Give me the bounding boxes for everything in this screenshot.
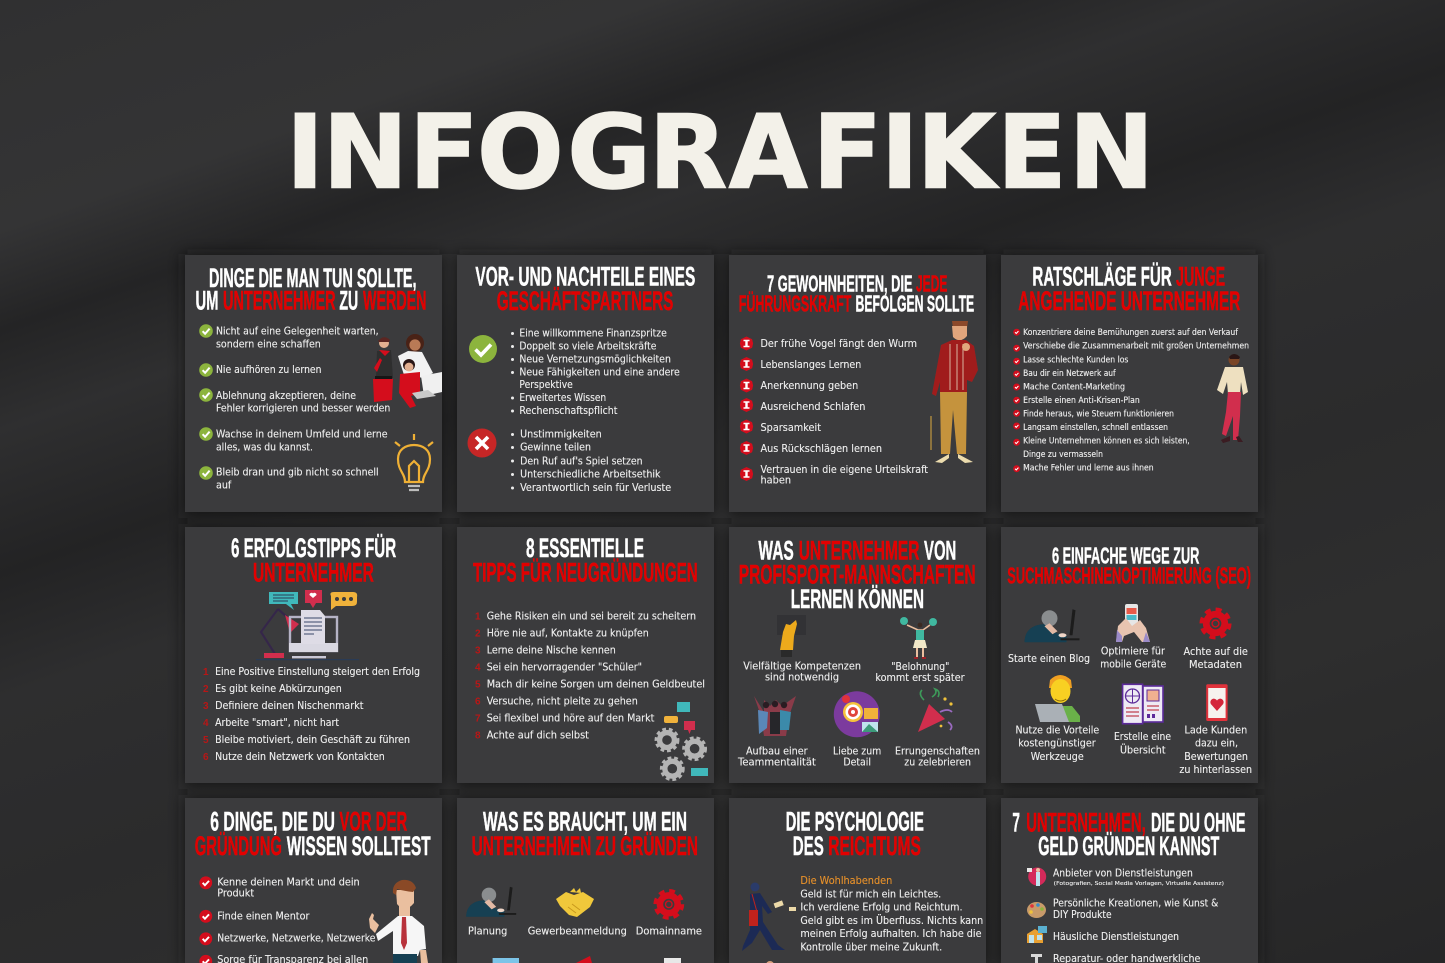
heading: DINGE DIE MAN TUN SOLLTE, [209, 263, 416, 293]
list: Vertrauen in die eigene Urteilskraft [760, 463, 928, 476]
list: Anerkennung geben [760, 379, 858, 392]
icon: photographer [1027, 868, 1046, 886]
list: disadvantages: Gewinne teilen [520, 443, 591, 454]
list: Bleibe motiviert, dein Geschäft zu führen [215, 735, 410, 746]
list: disadvantages: Unterschiedliche Arbeitsethik [520, 470, 661, 481]
text block: Kontrolle über meine Zukunft. [800, 942, 942, 953]
list: disadvantages [511, 429, 671, 494]
list: advantages: Rechenschaftspflicht [519, 406, 618, 417]
list: haben [760, 473, 791, 486]
icon: business people [373, 334, 442, 408]
icon: party popper [918, 689, 953, 732]
list: Konzentriere deine Bemühungen zuerst auf den Verkauf [1023, 327, 1239, 337]
heading: GELD GRÜNDEN KANNST [1038, 831, 1219, 861]
heading: UNTERNEHMER [253, 557, 374, 587]
panel: 8 essentielle Tipps [457, 527, 714, 783]
heading: DIE DU OHNE [1151, 808, 1246, 838]
captions row one: kommt erst später [875, 673, 965, 684]
list numbers: 6 [475, 697, 481, 708]
list: advantages: Neue Vernetzungsmöglichkeiten [519, 354, 671, 365]
heading: JEDE [916, 271, 947, 297]
icon: person at board [777, 615, 806, 657]
heading: GRÜNDUNG [195, 831, 282, 861]
heading [1007, 543, 1251, 589]
list: disadvantages: Verantwortlich sein für Verluste [520, 483, 671, 494]
heading: DES [793, 831, 824, 861]
title: INFOGRAFIKEN [286, 93, 1154, 212]
list: Finde heraus, wie Steuern funktionieren [1023, 408, 1174, 418]
list numbers [203, 667, 209, 763]
icon: businessman [369, 880, 428, 963]
heading: WAS [758, 535, 794, 565]
list: Produkt [217, 889, 254, 900]
list: Mache Content-Marketing [1023, 381, 1125, 391]
captions row two: Aufbau einer [746, 746, 808, 757]
heading: TIPPS FÜR NEUGRÜNDUNGEN [473, 557, 698, 587]
heading: RATSCHLÄGE FÜR [1032, 262, 1172, 292]
icons cropped at bottom [493, 956, 681, 963]
list numbers: 5 [475, 680, 481, 691]
icon: palette [1027, 902, 1046, 918]
heading: VOR DER [339, 807, 407, 837]
heading: UNTERNEHMEN, [1026, 808, 1146, 838]
list: Sparsamkeit [760, 421, 821, 434]
icon: phone in hands [1116, 604, 1150, 642]
list: Sei flexibel und höre auf den Markt [487, 714, 654, 725]
text block: Geld ist für mich ein Leichtes. [800, 889, 941, 900]
list: (Fotografien, Social Media Vorlagen, Virtuelle Assistenz) [1054, 881, 1224, 887]
captions row two: Übersicht [1120, 743, 1166, 756]
list [215, 667, 420, 763]
captions row two: Errungenschaften [895, 746, 980, 757]
captions row two: dazu ein, [1195, 739, 1238, 750]
panel shadows [183, 254, 1260, 963]
icon: red gear [656, 891, 682, 917]
list: Netzwerke, Netzwerke, Netzwerke [217, 934, 376, 945]
list: Ablehnung akzeptieren, deine [216, 391, 356, 402]
captions row one: "Belohnung" [891, 662, 949, 673]
captions row two: zu zelebrieren [904, 758, 971, 769]
heading [739, 271, 974, 317]
list: Wachse in deinem Umfeld und lerne [216, 429, 388, 440]
captions row one [1008, 647, 1248, 671]
icon: hammer [1031, 954, 1042, 963]
list: DIY Produkte [1053, 910, 1112, 921]
list: Lasse schlechte Kunden los [1023, 354, 1128, 364]
list numbers: 1 [203, 667, 209, 678]
list numbers: 3 [203, 701, 209, 712]
list: advantages: Neue Fähigkeiten und eine andere [519, 367, 680, 378]
heading: VOR- UND NACHTEILE EINES [475, 262, 695, 292]
text block [800, 876, 983, 953]
heading: 6 ERFOLGSTIPPS FÜR [231, 533, 396, 563]
list numbers: 5 [203, 735, 209, 746]
list numbers: 6 [203, 752, 209, 763]
list: Mache Fehler und lerne aus ihnen [1023, 462, 1154, 472]
list [1023, 327, 1249, 472]
heading [196, 263, 426, 316]
list: disadvantages: Den Ruf auf's Spiel setzen [520, 456, 643, 467]
list: auf [216, 481, 232, 492]
heading [739, 535, 976, 614]
heading: FÜHRUNGSKRAFT [739, 291, 851, 317]
heading: JUNGE [1176, 262, 1225, 292]
heading: WAS ES BRAUCHT, UM EIN [483, 807, 687, 837]
list: Definiere deinen Nischenmarkt [215, 701, 364, 712]
list: advantages: Eine willkommene Finanzspritze [519, 328, 667, 339]
icon: check [469, 335, 497, 363]
captions row two: Teammentalität [737, 758, 816, 769]
icon: planning person [466, 887, 516, 917]
list: Gehe Risiken ein und sei bereit zu scheitern [487, 612, 696, 623]
icon: sitemap [1123, 684, 1163, 724]
panel: 7 Unternehmen [1001, 798, 1258, 963]
heading: ANGEHENDE UNTERNEHMER [1018, 286, 1240, 316]
list: advantages [511, 328, 680, 417]
list: Lerne deine Nische kennen [487, 646, 616, 657]
heading: 6 DINGE, DIE DU [210, 807, 335, 837]
captions row one: Vielfältige Kompetenzen [743, 662, 861, 673]
icon: cross [468, 428, 496, 458]
check icons [1013, 329, 1020, 472]
heading [472, 807, 698, 861]
list: Nutze dein Netzwerk von Kontakten [215, 752, 385, 763]
list numbers [475, 612, 481, 742]
list numbers: 2 [203, 684, 209, 695]
captions row two [1016, 725, 1252, 776]
captions row two [737, 746, 980, 769]
icon: man in red sweater [931, 321, 978, 463]
panel: Was es braucht [457, 798, 714, 963]
heading: 7 [1012, 808, 1020, 838]
heading [1012, 808, 1246, 861]
icon: man in red trousers [1217, 354, 1248, 443]
list: Anbieter von Dienstleistungen [1053, 869, 1193, 880]
heading [1018, 262, 1240, 316]
list: Aus Rückschlägen lernen [760, 442, 882, 455]
heading: 7 GEWOHNHEITEN, DIE [767, 271, 913, 297]
captions row one: mobile Geräte [1100, 660, 1166, 671]
list: advantages: Perspektive [519, 380, 573, 391]
list [216, 326, 390, 492]
list: Kleine Unternehmen können es sich leisten, [1023, 436, 1190, 446]
captions: Domainname [636, 926, 702, 937]
captions row one: Achte auf die [1184, 647, 1248, 658]
list: Achte auf dich selbst [487, 731, 589, 742]
heading: 6 EINFACHE WEGE ZUR [1052, 543, 1200, 569]
panel: Ratschläge [1001, 255, 1258, 512]
list: sondern eine schaffen [216, 339, 321, 350]
panel: Psychologie des Reichtums [729, 798, 986, 963]
captions row two: Werkzeuge [1031, 752, 1084, 763]
panel: 6 Erfolgstipps [185, 527, 442, 783]
captions row two: Nutze die Vorteile [1016, 725, 1099, 736]
list: Nie aufhören zu lernen [216, 365, 322, 376]
text block: meinen Erfolg aufhalten. Ich habe die [800, 929, 982, 940]
list: Fehler korrigieren und besser werden [216, 404, 390, 415]
captions row two: Liebe zum [833, 746, 881, 757]
list: Nicht auf eine Gelegenheit warten, [216, 326, 379, 337]
list: Sei ein hervorragender "Schüler" [487, 663, 642, 674]
captions row two: kostengünstiger [1018, 739, 1096, 750]
heading: REICHTUMS [828, 831, 921, 861]
list numbers: 3 [475, 646, 481, 657]
icon: team [754, 696, 796, 736]
heading [231, 533, 396, 587]
heading: UNTERNEHMEN ZU GRÜNDEN [472, 831, 698, 861]
list numbers: 2 [475, 629, 481, 640]
captions row one: sind notwendig [765, 673, 839, 684]
text block: Die Wohlhabenden [800, 876, 892, 887]
list: Verschiebe die Zusammenarbeit mit großen Unternehmen [1023, 341, 1249, 351]
list [217, 878, 376, 963]
heading: GESCHÄFTSPARTNERS [497, 286, 673, 316]
list: Es gibt keine Abkürzungen [215, 684, 342, 695]
heading: LERNEN KÖNNEN [791, 584, 924, 614]
list: Eine Positive Einstellung steigert den Erfolg [215, 667, 420, 678]
captions row one: Starte einen Blog [1008, 654, 1090, 665]
icon: desk lamp and computer [256, 590, 359, 660]
captions row one [743, 662, 965, 684]
list: alles, was du kannst. [216, 442, 313, 453]
heading: DIE PSYCHOLOGIE [786, 807, 924, 837]
heading: 8 ESSENTIELLE [526, 533, 644, 563]
list [760, 337, 928, 486]
list: Finde einen Mentor [217, 911, 310, 922]
icon: person at computer [1024, 609, 1080, 642]
icon: red gear [1202, 610, 1229, 637]
panel: Vor- und Nachteile [457, 255, 714, 512]
list: Der frühe Vogel fängt den Wurm [760, 337, 917, 350]
text block: Ich verdiene Erfolg und Reichtum. [800, 903, 962, 914]
list [487, 612, 705, 742]
check icons [199, 324, 213, 480]
heading [195, 807, 431, 861]
list: Arbeite "smart", nicht hart [215, 718, 339, 729]
heading: UNTERNEHMER [223, 286, 336, 316]
icon: boy with laptop [1035, 675, 1080, 722]
list: Erstelle einen Anti-Krisen-Plan [1023, 395, 1140, 405]
icon: handshake [556, 888, 594, 917]
list: Mach dir keine Sorgen um deinen Geldbeutel [487, 680, 705, 691]
captions row one: Optimiere für [1101, 647, 1166, 658]
captions row two: Detail [843, 758, 871, 769]
icon: cheerleader [900, 617, 937, 658]
list [1053, 869, 1224, 963]
heading: BEFOLGEN SOLLTE [856, 291, 974, 317]
captions row two: Bewertungen [1184, 752, 1248, 763]
icon: target in purple circle [834, 691, 880, 737]
panel grid [185, 255, 1258, 963]
heading: UNTERNEHMER [799, 535, 920, 565]
captions [468, 926, 702, 937]
list: Bau dir ein Netzwerk auf [1023, 368, 1117, 378]
panel: Profisport [729, 527, 986, 783]
captions row two: zu hinterlassen [1179, 765, 1252, 776]
icon: walking man [742, 882, 796, 963]
heading: SUCHMASCHINENOPTIMIERUNG (SEO) [1007, 563, 1251, 589]
list: Bleib dran und gib nicht so schnell [216, 468, 379, 479]
captions row two: Lade Kunden [1184, 725, 1247, 736]
list numbers: 4 [203, 718, 209, 729]
list: Persönliche Kreationen, wie Kunst & [1053, 899, 1218, 910]
list numbers: 8 [475, 731, 481, 742]
panel: 7 Gewohnheiten [729, 255, 986, 512]
heading: ZU [339, 286, 358, 316]
list: Häusliche Dienstleistungen [1053, 932, 1179, 943]
panel: SEO [1001, 527, 1258, 783]
list: advantages: Erweitertes Wissen [519, 393, 606, 404]
heading [473, 533, 698, 587]
icon: light bulb [395, 434, 433, 490]
check icons [199, 876, 212, 963]
list icons [740, 336, 753, 481]
heading: WERDEN [363, 286, 426, 316]
list: advantages: Doppelt so viele Arbeitskräfte [519, 341, 656, 352]
list: Versuche, nicht pleite zu gehen [487, 697, 638, 708]
list: Dinge zu vermasseln [1023, 449, 1103, 459]
captions: Planung [468, 926, 507, 937]
heading: VON [924, 535, 956, 565]
text block: Geld gibt es im Überfluss. Nichts kann [800, 914, 983, 927]
icon: gears [656, 702, 708, 779]
list: Lebenslanges Lernen [760, 358, 861, 371]
heading [786, 807, 924, 861]
panel: Dinge die man tun sollte [185, 255, 442, 512]
list: Langsam einstellen, schnell entlassen [1023, 422, 1168, 432]
list numbers: 7 [475, 714, 481, 725]
captions: Gewerbeanmeldung [528, 926, 627, 937]
heading [475, 262, 695, 316]
captions row two: Erstelle eine [1114, 732, 1171, 743]
list: disadvantages: Unstimmigkeiten [520, 429, 602, 440]
list: Ausreichend Schlafen [760, 400, 865, 413]
heading: PROFISPORT-MANNSCHAFTEN [739, 560, 976, 590]
icon: house [1027, 926, 1047, 943]
panel: 6 Dinge [185, 798, 442, 963]
list numbers: 4 [475, 663, 481, 674]
heading: UM [196, 286, 218, 316]
heading: WISSEN SOLLTEST [287, 831, 431, 861]
icon: phone with heart [1206, 684, 1228, 721]
list: Höre nie auf, Kontakte zu knüpfen [487, 629, 649, 640]
list: Kenne deinen Markt und dein [217, 878, 360, 889]
captions row one: Metadaten [1189, 660, 1242, 671]
list numbers: 1 [475, 612, 481, 623]
